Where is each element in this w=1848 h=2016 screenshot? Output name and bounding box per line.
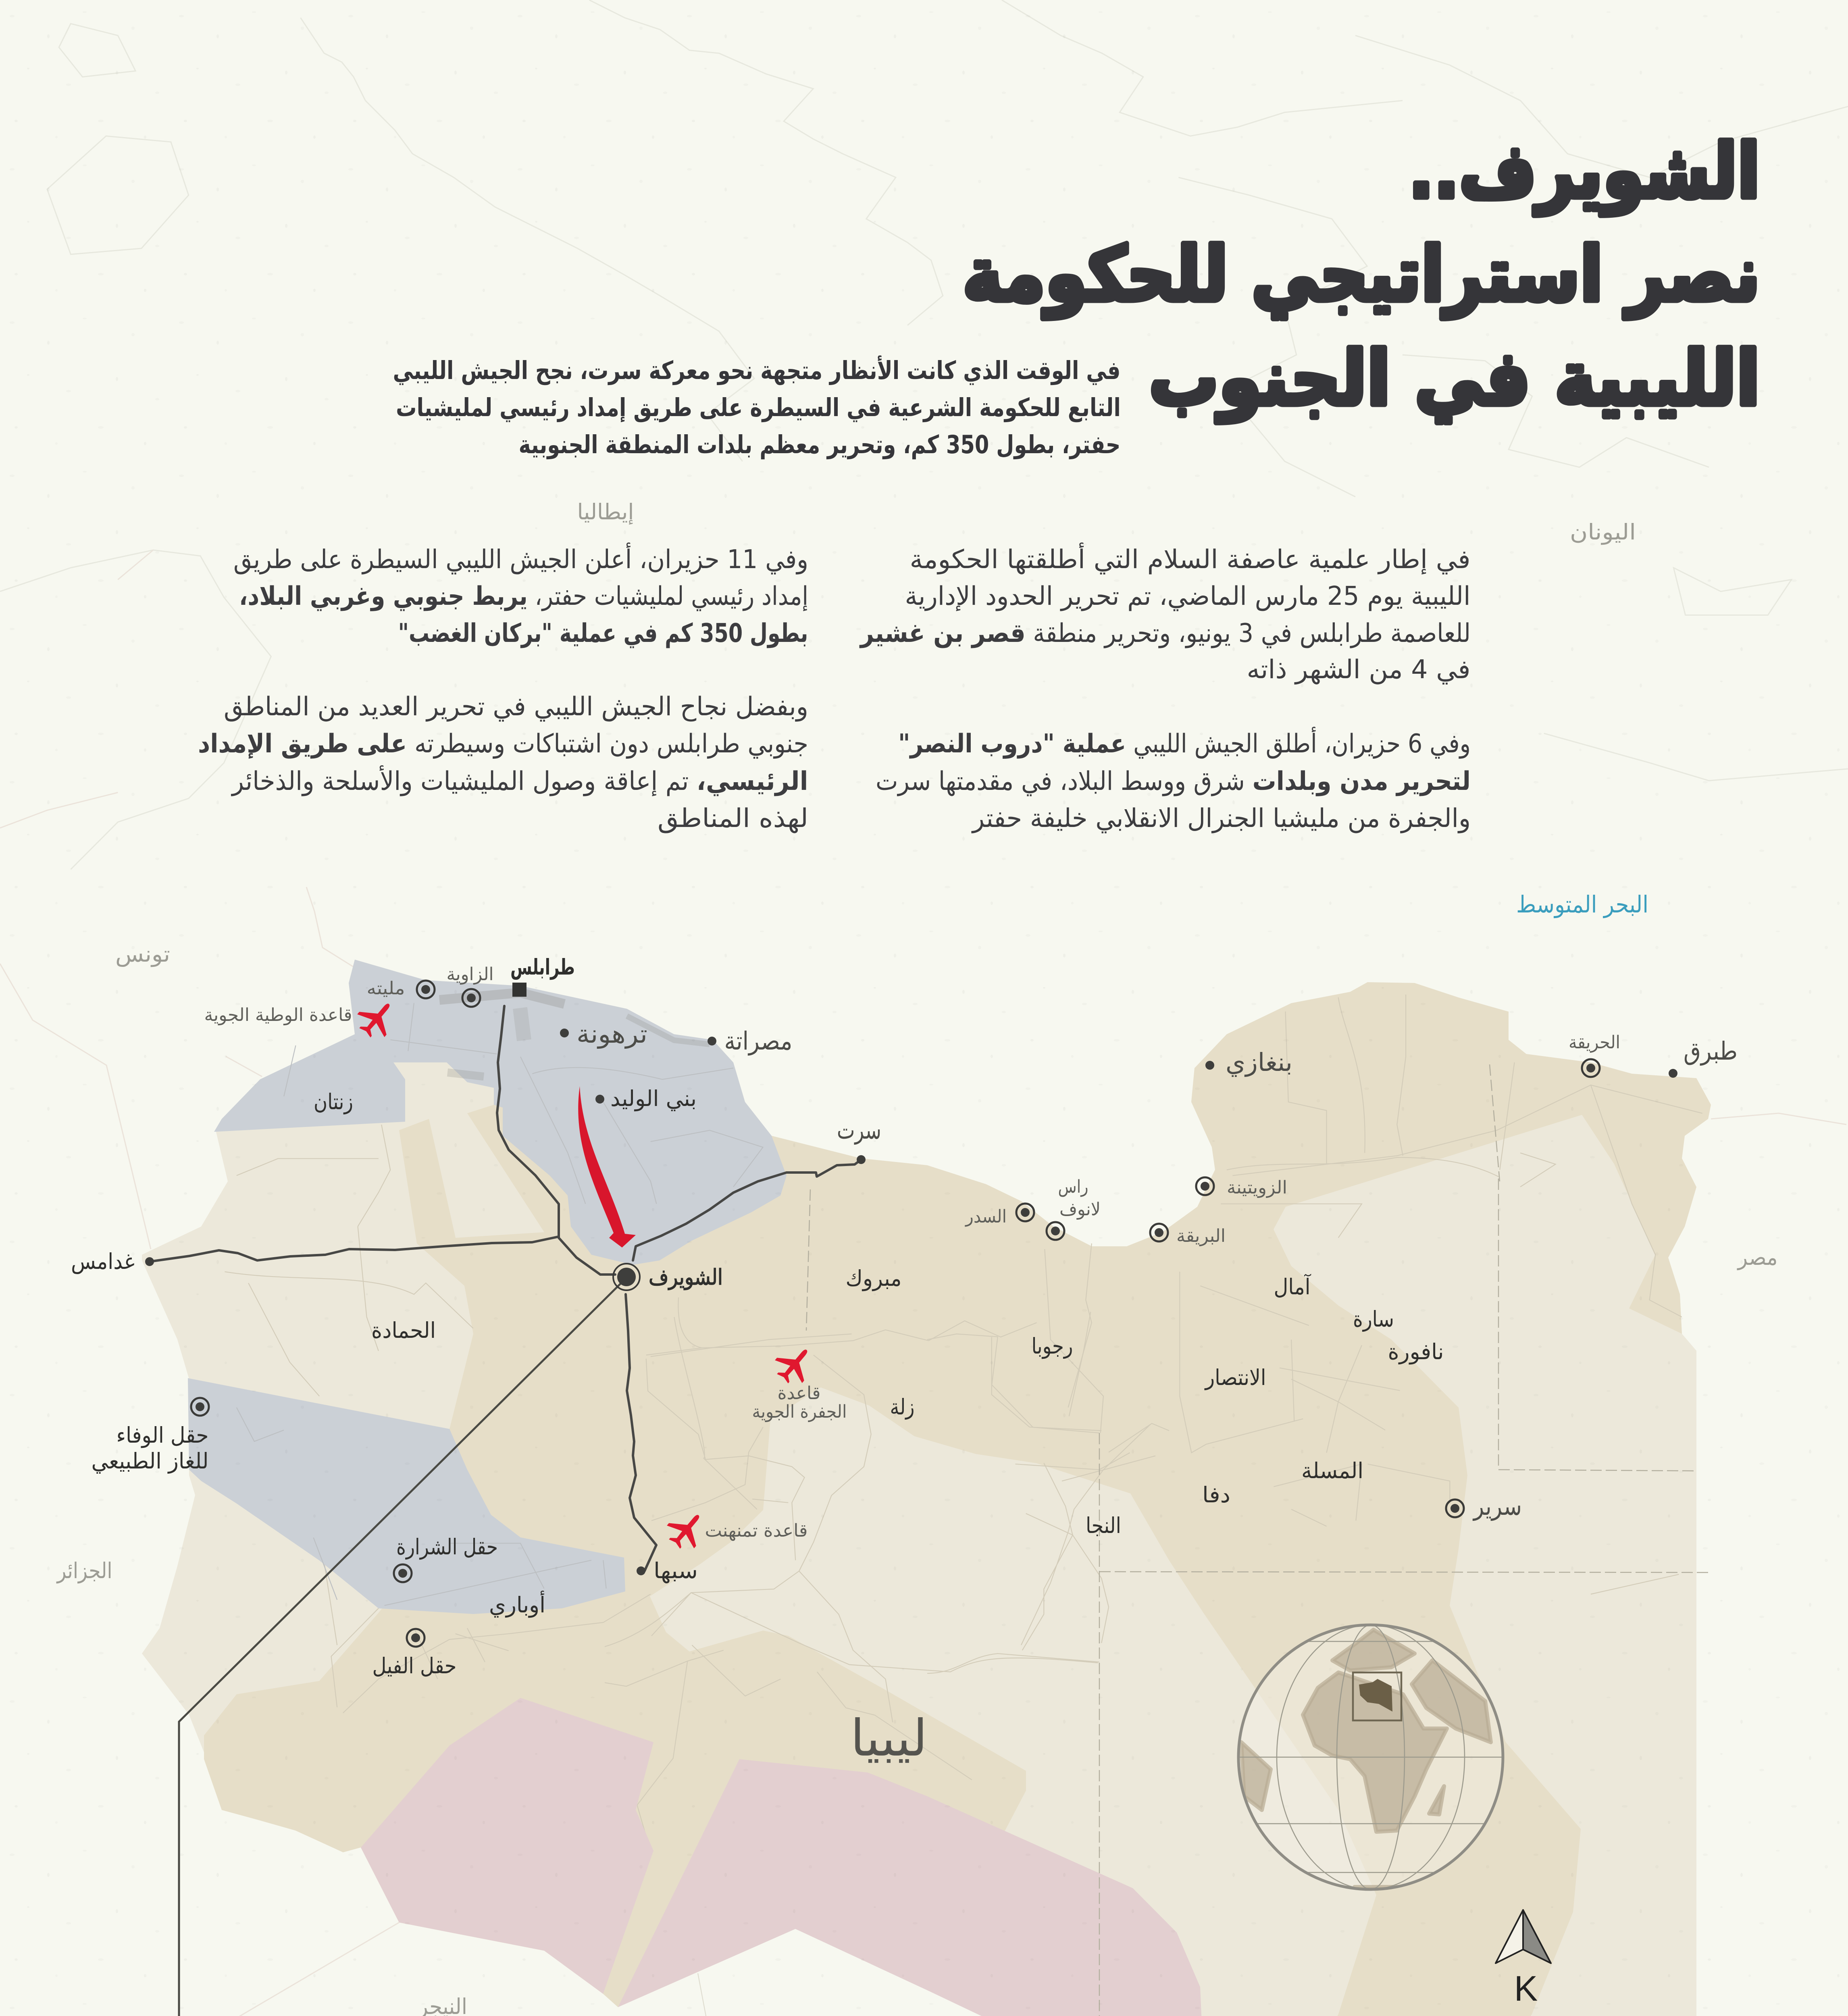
intro paragraph: في الوقت الذي كانت الأنظار متجهة نحو معركة سرت، نجح الجيش الليبي <box>393 355 1121 385</box>
map city labels: west: زلة <box>890 1394 914 1420</box>
country and sea labels: مصر <box>1737 1245 1778 1270</box>
map city labels: east: نافورة <box>1388 1339 1444 1364</box>
map city labels: east: بنغازي <box>1226 1048 1292 1077</box>
map city labels: west: الحمادة <box>371 1318 436 1343</box>
text block: right column: والجفرة من مليشيا الجنرال الانقلابي خليفة حفتر <box>971 804 1471 833</box>
map: internationally recognised government territory (south-west) <box>188 1378 625 1614</box>
map city labels: west: قاعدة <box>777 1383 821 1404</box>
text block: right column <box>859 542 1471 833</box>
text block: right column: لتحرير مدن وبلدات شرق ووسط البلاد، في مقدمتها سرت <box>876 766 1471 796</box>
map city labels: west: مبروك <box>846 1266 901 1291</box>
map city labels: west <box>71 954 914 1679</box>
map city labels: east: دفا <box>1202 1482 1230 1508</box>
map: internationally recognised government territory (north-west) <box>214 960 787 1265</box>
intro paragraph: حفتر، بطول 350 كم، وتحرير معظم بلدات المنطقة الجنوبية <box>518 430 1121 459</box>
map city labels: west: حقل الشرارة <box>396 1534 498 1560</box>
icon: plane at al-Jufra base <box>769 1339 820 1390</box>
icon: north arrow <box>1496 1910 1551 2008</box>
map city labels: east: راس <box>1058 1177 1088 1197</box>
map city labels: east: السدر <box>965 1206 1007 1227</box>
inset globe <box>1234 1625 1508 1895</box>
map city labels: east <box>965 1032 1738 1538</box>
map city labels: west: حقل الوفاء <box>116 1422 209 1448</box>
text block: right column: للعاصمة طرابلس في 3 يونيو، وتحرير منطقة قصر بن غشير <box>859 619 1471 648</box>
text block: left column <box>198 542 808 833</box>
map: local armed groups territory (west) <box>361 1698 653 1994</box>
icon: plane at al-Watiya base <box>351 993 403 1044</box>
map city labels: east: البريقة <box>1176 1226 1226 1246</box>
map city labels: west: غدامس <box>71 1249 135 1274</box>
map city labels: west: أوباري <box>489 1591 545 1618</box>
intro paragraph: التابع للحكومة الشرعية في السيطرة على طريق إمداد رئيسي لمليشيات <box>396 393 1121 422</box>
map city labels: west: طرابلس <box>510 954 575 980</box>
map city labels: west: قاعدة تمنهنت <box>705 1520 808 1541</box>
map city labels: east: لانوف <box>1059 1199 1101 1220</box>
map city labels: west: سرت <box>837 1115 881 1145</box>
text block: left column: وبفضل نجاح الجيش الليبي في تحرير العديد من المناطق <box>224 692 808 722</box>
map city labels: west: ترهونة <box>576 1019 647 1049</box>
map city labels: east: الزويتينة <box>1227 1177 1287 1198</box>
neighbouring country borders <box>0 887 1846 2016</box>
text block: left column: لهذه المناطق <box>658 804 808 833</box>
map city labels: east: رجوبا <box>1031 1333 1073 1359</box>
map city labels: east: النجا <box>1086 1513 1121 1538</box>
map city labels: west: الجفرة الجوية <box>752 1402 847 1422</box>
map city labels: west: قاعدة الوطية الجوية <box>204 1005 352 1025</box>
icon: plane at Tamanhint base <box>661 1504 712 1556</box>
map city labels: west: للغاز الطبيعي <box>91 1448 209 1474</box>
text block: left column: بطول 350 كم في عملية "بركان الغضب" <box>398 619 808 648</box>
map: faint road network <box>225 995 1702 1855</box>
map city labels: west: الشويرف <box>649 1264 723 1290</box>
map markers <box>145 981 1677 1647</box>
map city labels: west: مليته <box>367 978 405 999</box>
country and sea labels: البحر المتوسط <box>1516 891 1648 918</box>
map city labels: west: زنتان <box>314 1089 353 1114</box>
country and sea labels: الجزائر <box>56 1558 112 1583</box>
intro paragraph <box>393 355 1121 459</box>
text block: left column: جنوبي طرابلس دون اشتباكات وسيطرته على طريق الإمداد <box>198 729 808 759</box>
map city labels: west: مصراتة <box>724 1026 793 1056</box>
text block: left column: إمداد رئيسي لمليشيات حفتر، يربط جنوبي وغربي البلاد، <box>239 581 808 611</box>
title: نصر استراتيجي للحكومة <box>963 231 1760 319</box>
icon: north arrow: K <box>1514 1968 1538 2008</box>
map city labels: east: سرير <box>1472 1491 1522 1521</box>
map city labels: west: بني الوليد <box>610 1086 697 1111</box>
map label: Libya: ليبيا <box>851 1709 927 1768</box>
title <box>963 127 1760 423</box>
map: main roads <box>150 1006 861 1571</box>
map city labels: east: الانتصار <box>1204 1365 1266 1390</box>
connector line from Shwayrif to panel <box>179 1277 1043 2016</box>
map city labels: east: سارة <box>1353 1306 1394 1332</box>
text block: right column: في 4 من الشهر ذاته <box>1247 655 1471 685</box>
map city labels: east: المسلة <box>1301 1458 1363 1483</box>
country and sea labels: إيطاليا <box>577 499 634 525</box>
country and sea labels <box>56 499 1778 2016</box>
map city labels: east: آمال <box>1274 1274 1311 1300</box>
text block: right column: في إطار علمية عاصفة السلام التي أطلقتها الحكومة <box>909 542 1471 575</box>
map: Libya base territory <box>142 960 1711 2016</box>
map: urban and road texture on government areas <box>237 993 763 1606</box>
title: الليبية في الجنوب <box>1149 335 1760 423</box>
text block: left column: الرئيسي، تم إعاقة وصول المليشيات والأسلحة والذخائر <box>231 765 808 796</box>
map: Haftar militia territory <box>204 982 1711 2016</box>
country and sea labels: تونس <box>115 941 170 967</box>
map city labels: east: الحريقة <box>1569 1032 1620 1053</box>
map: dashed internal borders <box>806 1064 1709 2016</box>
map city labels: west: حقل الفيل <box>373 1653 456 1679</box>
map city labels: west: الزاوية <box>447 964 493 985</box>
map city labels: west: سبها <box>653 1558 698 1583</box>
title: الشويرف.. <box>1409 127 1760 216</box>
map city labels: east: طبرق <box>1684 1036 1738 1066</box>
arrow: advance toward Shwayrif <box>578 1086 636 1248</box>
country and sea labels: اليونان <box>1570 519 1636 545</box>
text block: left column: وفي 11 حزيران، أعلن الجيش الليبي السيطرة على طريق <box>233 542 808 575</box>
text block: right column: وفي 6 حزيران، أطلق الجيش الليبي عملية "دروب النصر" <box>898 727 1471 759</box>
text block: right column: الليبية يوم 25 مارس الماضي، تم تحرير الحدود الإدارية <box>905 581 1471 611</box>
map: local armed groups territory (east) <box>618 1759 1206 2016</box>
